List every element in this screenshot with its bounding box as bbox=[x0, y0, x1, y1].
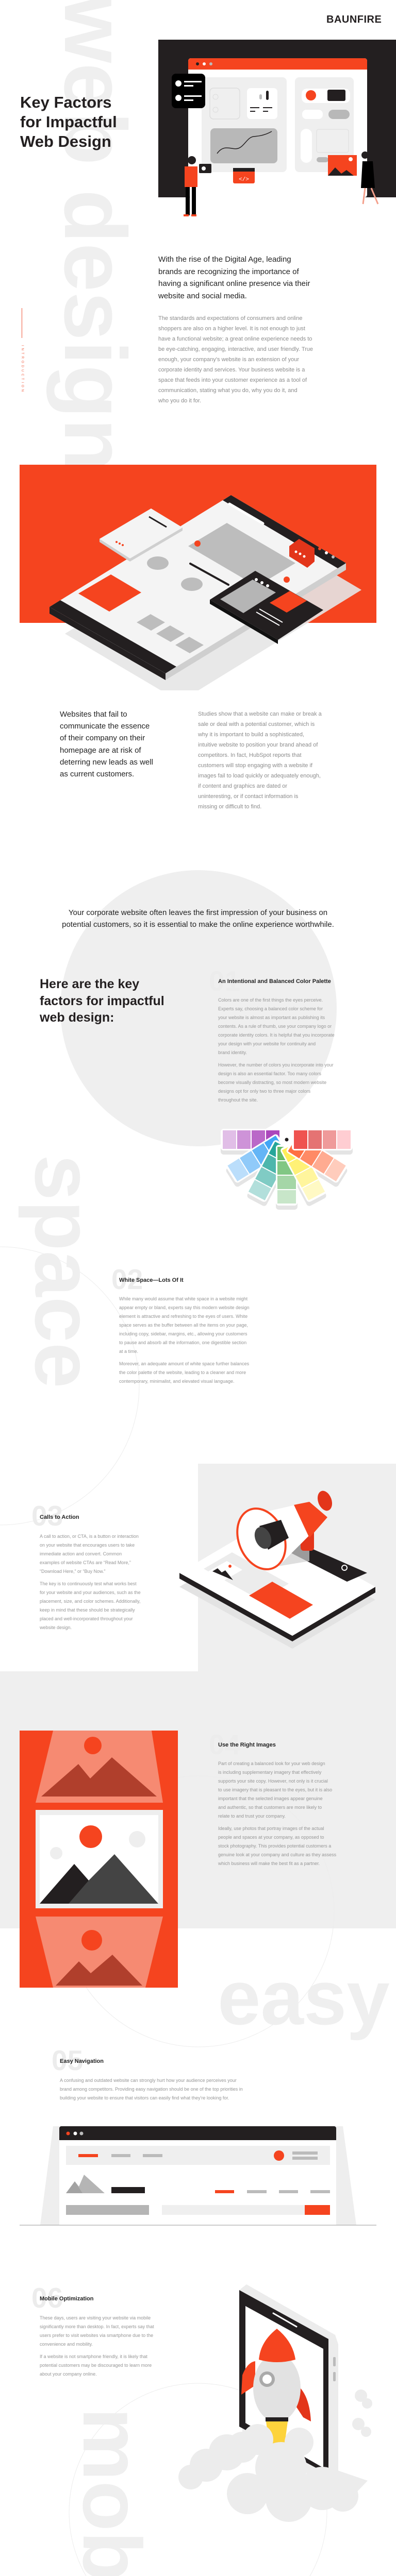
factor 03: calls to action: A call to action, or CTA, is a button or interaction bbox=[40, 1534, 139, 1539]
paragraph: studies show: sale or deal with a potential customer, which is bbox=[198, 721, 315, 727]
factor 06: mobile optimization: Mobile Optimization bbox=[40, 2296, 94, 2302]
factor 03: calls to action: 03 bbox=[31, 1500, 63, 1532]
hero illustration: browser with two people bbox=[158, 40, 396, 216]
factor 03: calls to action: keep in mind that these should be strategically bbox=[40, 1607, 135, 1613]
main page bbox=[50, 495, 346, 680]
code badge: </> bbox=[239, 177, 249, 183]
factor 03: calls to action: immediate action and convert. Common bbox=[40, 1551, 122, 1556]
factor 01: color palette: become visually distracting, so most modern website bbox=[218, 1080, 326, 1085]
factor 01: color palette: throughout the site. bbox=[218, 1097, 258, 1103]
clouds bbox=[178, 2389, 372, 2522]
megaphone bbox=[228, 1489, 335, 1577]
factor 05: easy navigation bbox=[52, 2044, 243, 2100]
illustration: color swatch fan bbox=[221, 1129, 353, 1210]
factor 03: calls to action: “Download Here,” or “Buy Now.” bbox=[40, 1569, 106, 1574]
background decoration: watermark words and circles: easy bbox=[218, 1954, 390, 2041]
factor 04: right images: which business will make the best fit as a partner. bbox=[218, 1861, 320, 1866]
paragraph: studies show: why it is important to build a sophisticated, bbox=[198, 732, 304, 738]
factor 04: right images: genuine look at your company and culture as they assess bbox=[218, 1852, 336, 1857]
factor 02: white space: including copy, sidebar, margins, etc., allowing your customers bbox=[119, 1331, 247, 1336]
factor 04: right images: supports your site copy. However, not only is it crucial bbox=[218, 1778, 328, 1784]
title bbox=[20, 93, 117, 150]
paragraph: studies show: images fail to load quickly or adequately enough, bbox=[198, 773, 321, 779]
intro body paragraph: The standards and expectations of consumers and online bbox=[158, 315, 302, 321]
factor 04: right images: 04 bbox=[209, 1728, 240, 1760]
intro lead text: website and social media. bbox=[158, 292, 247, 300]
factor 03: calls to action: Calls to Action bbox=[40, 1514, 79, 1520]
lead: websites that fail bbox=[60, 710, 153, 778]
paragraph: studies show: Studies show that a website can make or break a bbox=[198, 711, 322, 717]
factor 04: right images bbox=[209, 1728, 336, 1866]
factor 01: color palette: However, the number of colors you incorporate into your bbox=[218, 1062, 334, 1067]
section label: introduction: INTRODUCTION bbox=[21, 345, 24, 394]
intro body paragraph: have a functional website; a great online experience needs to bbox=[158, 336, 312, 342]
factor 02: white space: appear empty or bland, experts say this modern website design bbox=[119, 1305, 250, 1310]
factor 01: color palette: your website is almost as important as publishing its bbox=[218, 1015, 325, 1020]
factor 01: color palette: brand identity. bbox=[218, 1050, 247, 1055]
paragraph: studies show bbox=[198, 711, 322, 810]
paragraph: studies show: uninteresting, or if contact information is bbox=[198, 793, 298, 800]
lead: websites that fail: deterring new leads as well bbox=[60, 758, 153, 767]
factor 06: mobile optimization: significantly more than desktop. In fact, experts say that bbox=[40, 2324, 154, 2329]
title: Key Factors bbox=[20, 93, 111, 111]
title: Web Design bbox=[20, 132, 111, 150]
intro body paragraph: shoppers are also on a higher level. It is not enough to just bbox=[158, 326, 305, 332]
factor 04: right images: Use the Right Images bbox=[218, 1742, 276, 1748]
paragraph: studies show: customers will stop engaging with a website if bbox=[198, 762, 312, 769]
paragraph: studies show: intuitive website to position your brand ahead of bbox=[198, 742, 318, 748]
factor 03: calls to action: for your website and your audiences, such as the bbox=[40, 1590, 141, 1595]
factor 02: white space: Moreover, an adequate amount of white space further balances bbox=[119, 1361, 249, 1366]
factor 06: mobile optimization: These days, users are visiting your website via mobile bbox=[40, 2315, 151, 2320]
quote: first impression: Your corporate website often leaves the first impression of your business on bbox=[69, 908, 327, 917]
factor 04: right images: stock photography. This provides potential customers a bbox=[218, 1843, 331, 1849]
factor 02: white space: to pause and absorb all the information, one digestible section bbox=[119, 1340, 246, 1345]
intro body paragraph: be eye-catching, engaging, interactive, and user friendly. True bbox=[158, 346, 313, 352]
heading: key factors: Here are the key bbox=[40, 977, 139, 991]
intro lead text: having a significant online presence via their bbox=[158, 279, 310, 288]
factor 01: color palette: design is also an essential factor. Too many colors bbox=[218, 1071, 321, 1076]
factor 04: right images: to use imagery that is pleasant to the eyes, but it is also bbox=[218, 1787, 332, 1792]
lead: websites that fail: of their company on their bbox=[60, 734, 145, 742]
image card bbox=[328, 155, 357, 176]
factor 02: white space: the color palette of the website, leading to a cleaner and more bbox=[119, 1370, 246, 1375]
platform bbox=[179, 1524, 375, 1641]
heading: key factors: factors for impactful bbox=[40, 993, 164, 1008]
intro lead text bbox=[158, 255, 310, 300]
factor 06: mobile optimization bbox=[31, 2282, 154, 2377]
factor 03: calls to action: on your website that encourages users to take bbox=[40, 1543, 135, 1548]
intro body paragraph: communication, stating what you do, why you do it, and bbox=[158, 387, 298, 394]
paragraph: studies show: competitors. In fact, HubSpot reports that bbox=[198, 752, 302, 758]
factor 01: color palette: your design with your website for continuity and bbox=[218, 1041, 316, 1046]
factor 03: calls to action: placed and well-incorporated throughout your bbox=[40, 1616, 133, 1621]
factor 04: right images: people and spaces at your company, as opposed to bbox=[218, 1835, 324, 1840]
main image frame bbox=[36, 1810, 163, 1908]
factor 05: easy navigation: A confusing and outdated website can strongly hurt how your audience perceives your bbox=[60, 2078, 237, 2083]
intro body paragraph: enough, your company's website is an extension of your bbox=[158, 357, 299, 363]
black list card bbox=[172, 74, 205, 108]
factor 05: easy navigation: Easy Navigation bbox=[60, 2058, 104, 2064]
phone bbox=[239, 2284, 338, 2488]
faded top image bbox=[36, 1731, 163, 1803]
lead: websites that fail: homepage are at risk of bbox=[60, 746, 141, 755]
factor 02: white space: element is attractive and refreshing to the eyes of users. White bbox=[119, 1314, 248, 1319]
factor 06: mobile optimization: potential customers may be discouraged to learn more bbox=[40, 2363, 152, 2368]
paragraph: studies show: missing or difficult to find. bbox=[198, 804, 261, 810]
factor 02: white space: While many would assume that white space in a website might bbox=[119, 1296, 248, 1301]
factor 05: easy navigation: brand among competitors. Providing easy navigation should be one of the top priorities in bbox=[60, 2087, 243, 2092]
paragraph: studies show: if content and graphics are dated or bbox=[198, 783, 287, 789]
factor 01: color palette: Experts say, choosing a balanced color scheme for bbox=[218, 1006, 323, 1011]
lead: websites that fail: communicate the essence bbox=[60, 722, 150, 731]
illustration: phone with rocket bbox=[178, 2284, 372, 2522]
browser window bbox=[188, 58, 367, 197]
illustration: megaphone on web page bbox=[179, 1491, 375, 1649]
factor 04: right images: and authentic, so that customers are more likely to bbox=[218, 1805, 322, 1810]
background decoration: watermark words and circles: space bbox=[18, 1155, 110, 1388]
lead: websites that fail: Websites that fail to bbox=[60, 710, 127, 719]
factor 01: color palette: designs opt for only two to three major colors bbox=[218, 1089, 310, 1094]
logo: top: BAUNFIRE bbox=[326, 14, 382, 25]
heading: key factors: web design: bbox=[40, 1010, 114, 1025]
factor 01: color palette: contents. As a rule of thumb, use your company logo or bbox=[218, 1024, 332, 1029]
intro body paragraph: who you do it for. bbox=[158, 398, 201, 404]
factor 01: color palette: 01 bbox=[209, 965, 240, 997]
background decoration: watermark words and circles: web design bbox=[46, 0, 144, 472]
faded bottom image bbox=[36, 1917, 163, 1988]
factor 06: mobile optimization: convenience and mobility. bbox=[40, 2342, 93, 2347]
intro body paragraph: corporate identity and services. Your business website is a bbox=[158, 367, 305, 373]
lead: websites that fail: as current customers. bbox=[60, 770, 134, 778]
factor 01: color palette: Colors are one of the first things the eyes perceive. bbox=[218, 997, 323, 1003]
illustration: right images panel bbox=[20, 1731, 178, 1988]
factor 04: right images: relate to and trust your company. bbox=[218, 1814, 286, 1819]
factor 05: easy navigation: building your website to ensure that visitors can easily find what they're looking for. bbox=[60, 2095, 229, 2100]
factor 04: right images: Part of creating a balanced look for your web design bbox=[218, 1761, 325, 1766]
factor 01: color palette: corporate identity colors. It is helpful that you incorporate bbox=[218, 1032, 335, 1038]
factor 01: color palette bbox=[209, 965, 335, 1103]
factor 05: easy navigation: 05 bbox=[52, 2044, 83, 2076]
factor 06: mobile optimization: 06 bbox=[31, 2282, 63, 2314]
intro lead text: With the rise of the Digital Age, leading bbox=[158, 255, 291, 264]
factor 06: mobile optimization: users prefer to visit websites via smartphone due to the bbox=[40, 2333, 153, 2338]
factor 02: white space: contemporary, minimalist, and elevated visual language. bbox=[119, 1379, 234, 1384]
red banner with isometric website illustration bbox=[20, 465, 376, 690]
factor 03: calls to action: placement, size, and color schemes. Additionally, bbox=[40, 1599, 140, 1604]
factor 06: mobile optimization: about your company online. bbox=[40, 2371, 97, 2377]
factor 03: calls to action bbox=[31, 1500, 141, 1630]
factor 04: right images: is including supplementary imagery that effectively bbox=[218, 1770, 321, 1775]
dark tablet bbox=[210, 571, 323, 644]
factor 06: mobile optimization: If a website is not smartphone friendly, it is likely that bbox=[40, 2354, 147, 2359]
nav bar bbox=[66, 2146, 330, 2165]
factor 02: white space: at a time. bbox=[119, 1349, 138, 1354]
title: for Impactful bbox=[20, 113, 117, 131]
intro body paragraph: space that feeds into your customer experience as a tool of bbox=[158, 377, 307, 383]
intro body paragraph bbox=[158, 315, 313, 404]
factor 04: right images: important that the selected images appear genuine bbox=[218, 1796, 323, 1801]
factor 02: white space: White Space—Lots Of It bbox=[119, 1277, 184, 1283]
floating settings card bbox=[100, 509, 183, 562]
illustration: navigation browser bbox=[20, 2126, 376, 2226]
heading: key factors bbox=[40, 977, 164, 1025]
quote: first impression: potential customers, so it is essential to make the online experience worthwhile. bbox=[62, 920, 334, 929]
man with laptop bbox=[184, 156, 211, 216]
woman holding image bbox=[361, 151, 378, 204]
intro lead text: brands are recognizing the importance of bbox=[158, 267, 299, 276]
quote: first impression bbox=[62, 908, 334, 929]
factor 03: calls to action: website design. bbox=[40, 1625, 72, 1630]
code badge bbox=[233, 168, 255, 183]
factor 03: calls to action: The key is to continuously test what works best bbox=[40, 1581, 137, 1586]
factor 02: white space bbox=[111, 1263, 250, 1384]
factor 02: white space: 02 bbox=[111, 1263, 143, 1295]
chat bubble bbox=[289, 539, 315, 568]
factor 01: color palette: An Intentional and Balanced Color Palette bbox=[218, 978, 331, 985]
factor 02: white space: space serves as the buffer between all the items on your page, bbox=[119, 1323, 248, 1328]
rocket bbox=[241, 2329, 311, 2459]
factor 04: right images: Ideally, use photos that portray images of the actual bbox=[218, 1826, 324, 1831]
factor 03: calls to action: examples of website CTAs are “Read More,” bbox=[40, 1560, 131, 1565]
